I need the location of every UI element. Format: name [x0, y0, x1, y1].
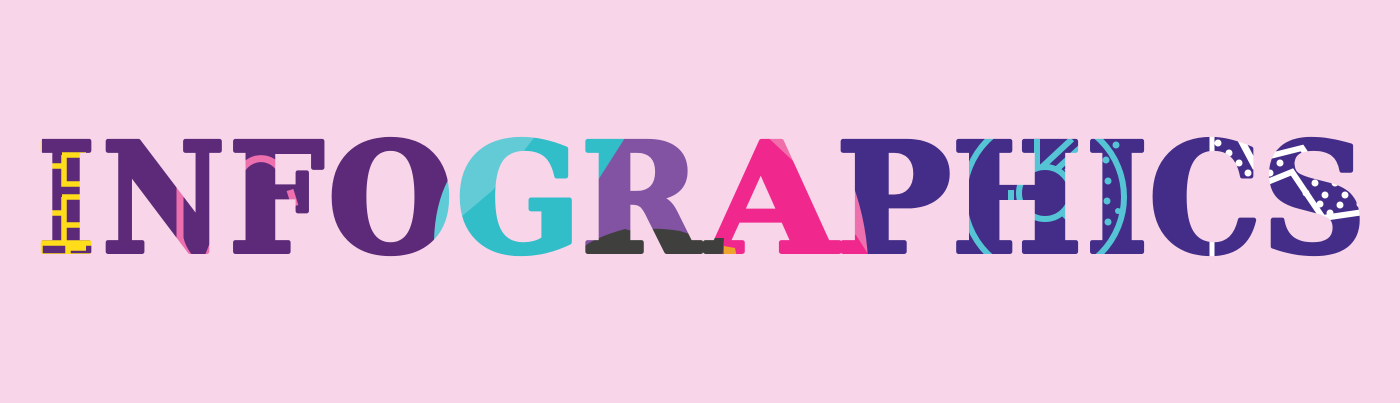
letter I with teal dots: I: [1086, 110, 1148, 288]
letter N with pink line: N: [102, 110, 225, 288]
letter P: P: [836, 110, 951, 288]
letter C with white stripes and dots: C: [1149, 110, 1261, 288]
letter H with teal circles: H: [952, 110, 1082, 288]
letter A in pink: A: [705, 110, 839, 288]
letter G in teal: G: [456, 110, 581, 288]
letter O: O: [328, 110, 453, 288]
letter F with pink arc: F: [229, 110, 324, 288]
letter I with yellow circuit lines: I: [37, 110, 95, 288]
letter S with tie pattern: S: [1262, 110, 1366, 288]
title: INFOGRAPHICS: [37, 110, 1366, 288]
letter R with moustache: R: [581, 110, 701, 288]
